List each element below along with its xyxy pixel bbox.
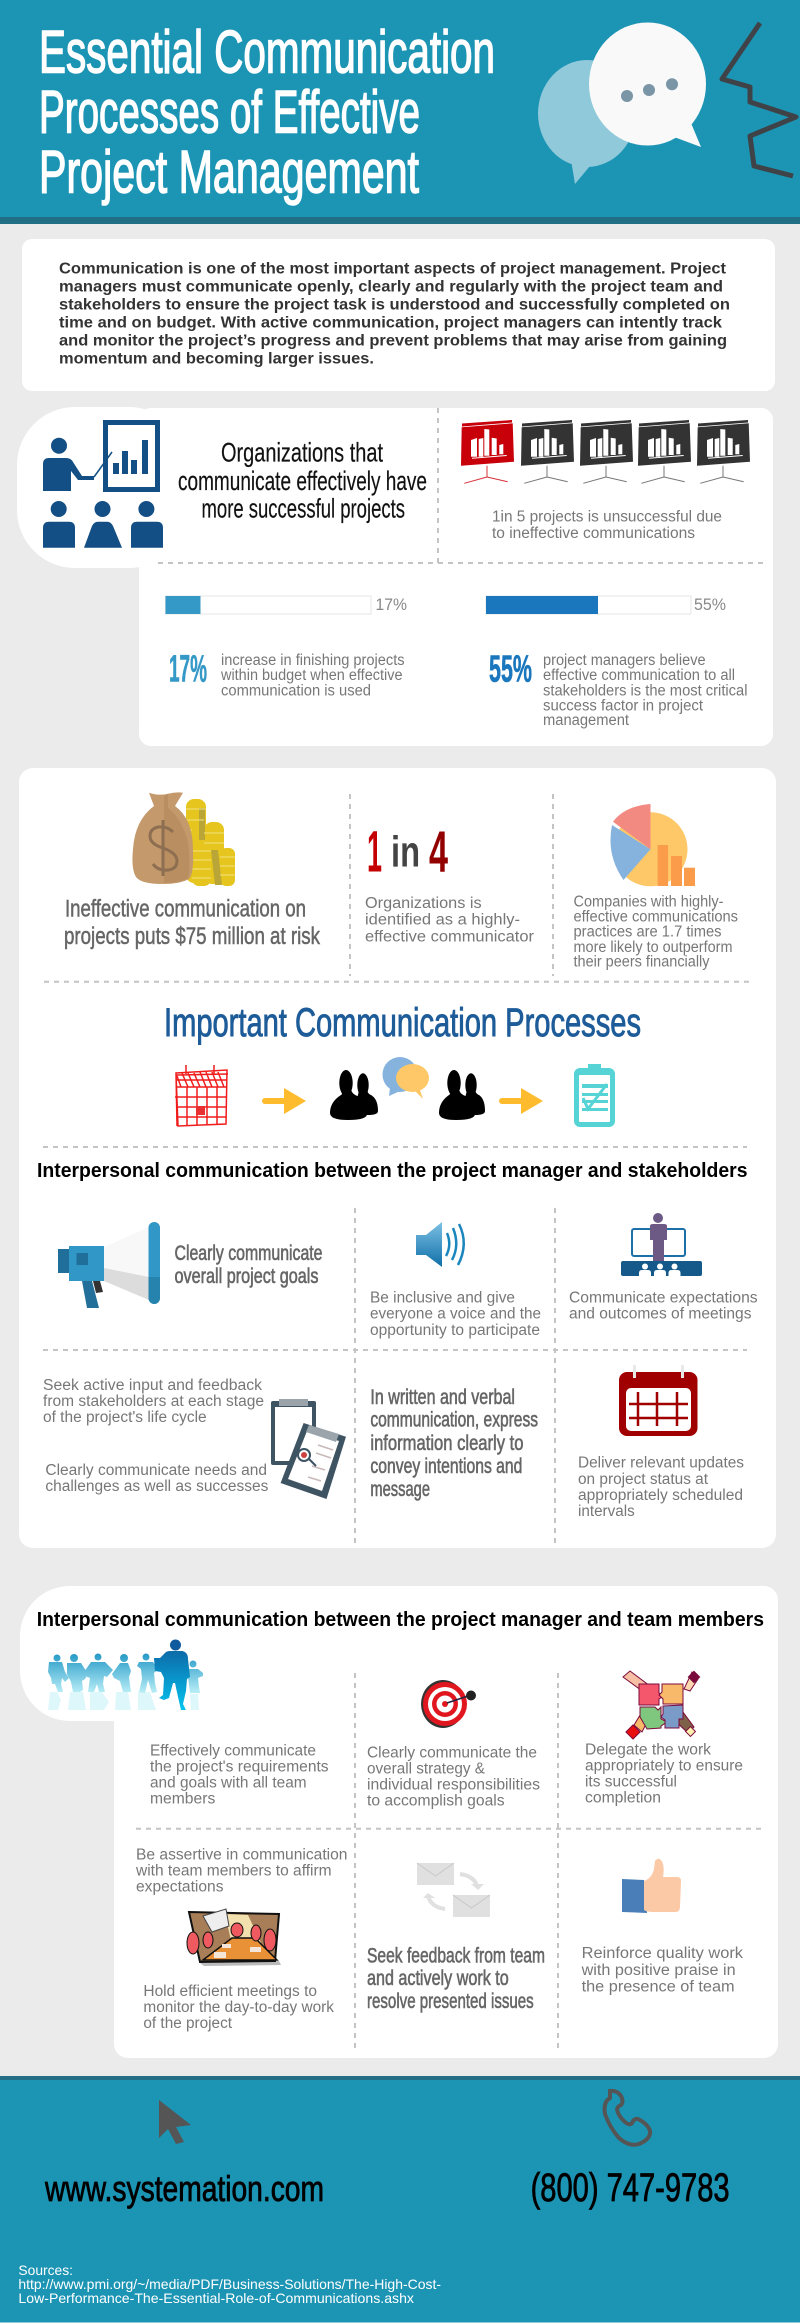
heading: organizations: Organizations that [221, 438, 383, 468]
stat: 1 in 4: 4 [429, 820, 448, 885]
text: seek active input: of the project's life cycle [43, 1409, 207, 1426]
text: hold efficient meetings: Hold efficient meetings to [143, 1983, 317, 2000]
icon: zigzag mouth line [722, 23, 796, 176]
icon: thumbs up [622, 1859, 681, 1913]
sources: Low-Performance-The-Essential-Role-of-Communications.ashx [18, 2290, 414, 2306]
text: be assertive: expectations [136, 1879, 224, 1896]
heading: team members: Interpersonal communication between the project manager and team members [37, 1609, 764, 1631]
text: $75 million: projects puts $75 million at risk [64, 923, 321, 950]
text: 1.7 times: Companies with highly- [574, 894, 724, 911]
panel: risk and processes and stakeholders [19, 768, 776, 1548]
arrow: process 1 [262, 1088, 306, 1114]
text: delegate: appropriately to ensure [585, 1758, 743, 1775]
text: written and verbal: convey intentions and [370, 1455, 522, 1478]
text: inclusive: opportunity to participate [370, 1322, 540, 1339]
text: 1.7 times: effective communications [574, 909, 738, 926]
text: reinforce: with positive praise in [581, 1962, 736, 1979]
text: be assertive [135, 1847, 348, 1896]
text: requirements: members [150, 1791, 216, 1808]
heading: organizations [178, 438, 427, 524]
stat: 55%: project managers believe [543, 652, 706, 669]
intro text: momentum and becoming larger issues. [59, 351, 374, 368]
icon: telephone [605, 2091, 650, 2145]
panel: successful projects [17, 407, 773, 746]
text: strategy: individual responsibilities [367, 1777, 540, 1794]
text: inclusive [370, 1290, 541, 1339]
icon: pie and bar chart [610, 804, 695, 886]
icon: team silhouettes [48, 1640, 203, 1710]
icon: target with dart [421, 1680, 476, 1728]
website: www.systemation.com [44, 2168, 324, 2209]
text: inclusive: Be inclusive and give [370, 1290, 515, 1307]
text: expectations: Communicate expectations [569, 1290, 758, 1307]
icon: clipboards [271, 1399, 346, 1499]
text: needs and challenges: Clearly communicate needs and [45, 1462, 267, 1479]
text: strategy: to accomplish goals [367, 1793, 505, 1810]
progress bar: 55%: 55% [694, 595, 726, 614]
sources: http://www.pmi.org/~/media/PDF/Business-Solutions/The-High-Cost- [18, 2276, 441, 2292]
text: seek active input: from stakeholders at each stage [43, 1393, 264, 1410]
text: 1 in 5 [492, 509, 722, 542]
text: deliver updates: on project status at [578, 1471, 709, 1488]
progress bar: 17%: 17% [376, 595, 407, 614]
text: written and verbal: message [370, 1478, 430, 1501]
text: strategy: overall strategy & [367, 1761, 486, 1778]
heading: organizations: communicate effectively have [178, 466, 427, 496]
text: deliver updates: intervals [578, 1503, 635, 1520]
stat: 55%: success factor in project [543, 697, 704, 714]
stat: 17% [169, 649, 405, 699]
text: delegate [585, 1742, 743, 1807]
text: written and verbal: information clearly to [370, 1432, 524, 1455]
text: reinforce: the presence of team [582, 1978, 735, 1996]
text: requirements: and goals with all team [150, 1775, 307, 1792]
text: seek active input [43, 1377, 264, 1426]
text: hold efficient meetings: of the project [143, 2015, 233, 2032]
text: 1.7 times [574, 894, 738, 971]
title: Essential Communication [39, 19, 495, 86]
intro text: and monitor the project’s progress and prevent problems that may arise from gaining [59, 333, 727, 350]
text: 1 in 4 [365, 895, 534, 946]
text: seek feedback: resolve presented issues [367, 1990, 534, 2013]
intro text: managers must communicate openly, clearly and regularly with the project team and [59, 279, 723, 296]
text: hold efficient meetings [143, 1983, 334, 2032]
text: 1 in 4: identified as a highly- [365, 912, 520, 929]
text: $75 million: Ineffective communication on [65, 896, 306, 923]
header banner [0, 0, 800, 224]
text: 1 in 5: 1in 5 projects is unsuccessful due [492, 509, 722, 526]
text: $75 million [64, 896, 321, 950]
text: 1.7 times: more likely to outperform [574, 939, 732, 956]
panel: team members [20, 1586, 778, 2058]
text: be assertive: Be assertive in communication [136, 1847, 348, 1864]
reflection of team [48, 1692, 199, 1710]
text: seek feedback: Seek feedback from team [367, 1945, 545, 1968]
stat: 55% [489, 649, 748, 729]
stat: 1 in 4: 1 [367, 820, 382, 885]
icon: five projector screens [461, 420, 750, 483]
text: written and verbal: In written and verbal [370, 1386, 515, 1409]
title: Project Management [39, 139, 419, 206]
text: deliver updates: appropriately scheduled [578, 1487, 743, 1504]
icon: sketched calendar [175, 1065, 228, 1126]
sources [18, 2262, 441, 2306]
text: expectations [569, 1290, 758, 1323]
icon: presenter on stage [621, 1213, 702, 1276]
text: requirements: Effectively communicate [150, 1743, 316, 1760]
text: requirements [150, 1743, 329, 1808]
stat: 1 in 4 [367, 820, 448, 885]
text: 1 in 4: effective communicator [365, 929, 534, 946]
sources: Sources: [18, 2262, 73, 2278]
text: delegate: completion [585, 1790, 661, 1807]
icon: money bag and coins [132, 792, 235, 886]
text: delegate: its successful [585, 1774, 677, 1791]
stat: 17%: increase in finishing projects [221, 652, 405, 669]
stat: 55%: management [543, 712, 630, 729]
stat: 55%: 55% [489, 649, 532, 691]
intro text: stakeholders to ensure the project task is understood and successfully completed on [59, 297, 730, 314]
icon: puzzle hands [623, 1671, 700, 1739]
text: be assertive: with team members to affirm [135, 1863, 332, 1880]
icon: presenter and audience [43, 422, 163, 548]
intro text: time and on budget. With active communication, project managers can intently track [59, 315, 722, 332]
text: reinforce [581, 1945, 743, 1996]
text: written and verbal [370, 1386, 538, 1501]
title [39, 19, 495, 206]
text: overall project goals: Clearly communicate [174, 1242, 322, 1265]
text: deliver updates: Deliver relevant updates [578, 1455, 744, 1472]
text: overall project goals [174, 1242, 322, 1288]
text: 1 in 5: to ineffective communications [492, 525, 695, 542]
title: Processes of Effective [39, 78, 420, 145]
text: seek active input: Seek active input and feedback [43, 1377, 262, 1394]
text: 1.7 times: their peers financially [574, 954, 710, 971]
text: overall project goals: overall project goals [174, 1265, 318, 1288]
text: delegate: Delegate the work [585, 1742, 711, 1759]
icon: cursor [159, 2100, 191, 2144]
icon: meeting room [187, 1909, 281, 1966]
stat: 17%: 17% [169, 649, 207, 691]
text: strategy: Clearly communicate the [367, 1745, 537, 1762]
arrow: process 2 [499, 1088, 543, 1114]
icon: megaphone [58, 1222, 160, 1308]
icon: checklist clipboard [574, 1064, 615, 1127]
phone number: (800) 747-9783 [531, 2166, 730, 2210]
progress bar: 55% [486, 595, 726, 614]
stat: 17%: within budget when effective [220, 667, 402, 684]
icon: speaker [416, 1222, 464, 1267]
text: seek feedback: and actively work to [367, 1967, 509, 1990]
text: seek feedback [367, 1945, 545, 2013]
footer [0, 2076, 800, 2323]
five team members [48, 1654, 203, 1693]
text: requirements: the project's requirements [150, 1759, 329, 1776]
text: needs and challenges [45, 1462, 269, 1495]
text: 1 in 4: Organizations is [365, 895, 482, 912]
icon: speech bubbles [538, 22, 706, 184]
intro text: Communication is one of the most important aspects of project management. Project [59, 261, 727, 278]
heading: organizations: more successful projects [202, 494, 405, 524]
progress bar: 17% [166, 595, 407, 614]
text: 1.7 times: practices are 1.7 times [574, 924, 722, 941]
stat: 55%: effective communication to all [543, 667, 735, 684]
stat: 17%: communication is used [221, 682, 371, 699]
icon: people with speech bubbles [330, 1057, 485, 1120]
text: expectations: and outcomes of meetings [569, 1306, 752, 1323]
intro text [59, 261, 730, 368]
text: deliver updates [578, 1455, 744, 1520]
stat: 55%: stakeholders is the most critical [543, 682, 748, 699]
icon: red calendar [619, 1365, 698, 1436]
icon: envelopes exchange [417, 1863, 490, 1917]
panel: introduction [22, 239, 775, 391]
text: written and verbal: communication, express [370, 1409, 538, 1432]
text: reinforce: Reinforce quality work [582, 1945, 743, 1962]
heading: stakeholders: Interpersonal communication between the project manager and stakeholders [37, 1160, 748, 1182]
text: hold efficient meetings: monitor the day-to-day work [143, 1999, 334, 2016]
text: inclusive: everyone a voice and the [370, 1306, 541, 1323]
stat: 1 in 4: in [391, 828, 420, 877]
text: needs and challenges: challenges as well as successes [45, 1478, 269, 1495]
text: strategy [367, 1745, 540, 1810]
